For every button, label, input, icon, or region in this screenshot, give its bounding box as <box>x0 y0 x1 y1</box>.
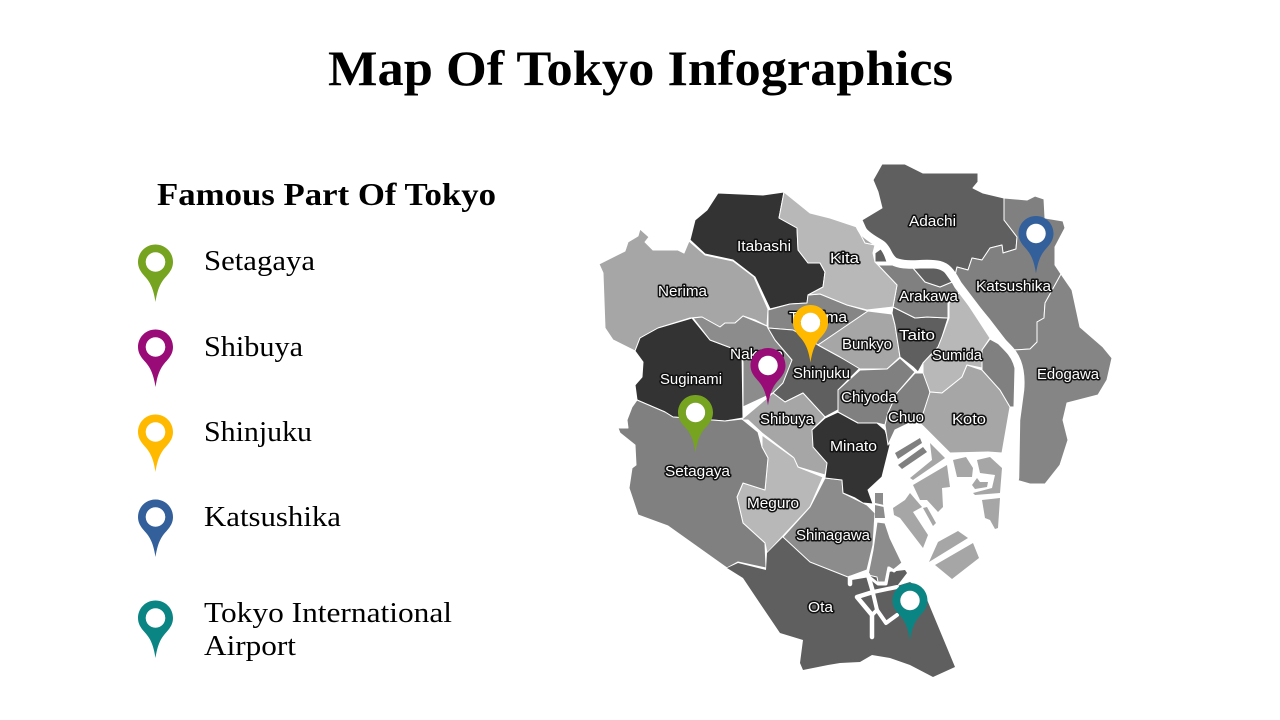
ward labels: Taito <box>899 328 935 344</box>
ward labels: Edogawa <box>1037 367 1100 383</box>
ward labels: Arakawa <box>899 289 959 305</box>
ward labels: Nakano <box>730 347 783 363</box>
ward labels <box>658 214 1100 616</box>
ward shapes <box>599 164 1112 677</box>
ward labels: Setagaya <box>665 464 731 480</box>
ward labels: Shinjuku <box>793 366 850 382</box>
legend item: Shibuya <box>138 330 304 387</box>
legend item: Setagaya <box>138 244 316 302</box>
ward labels: Suginami <box>660 372 722 388</box>
map of Tokyo wards <box>599 164 1112 677</box>
map pin: Tokyo International Airport <box>892 583 928 640</box>
ward labels: Toshima <box>789 310 848 326</box>
ward labels: Minato <box>830 439 877 455</box>
ward labels: Nerima <box>658 284 708 300</box>
ward labels: Katsushika <box>976 279 1052 295</box>
ward labels: Shinagawa <box>796 528 871 544</box>
bay islands <box>893 438 1002 579</box>
ward labels: Itabashi <box>737 239 791 255</box>
legend item: Shibuya: Shibuya <box>204 332 304 363</box>
legend item: Shinjuku <box>138 414 312 472</box>
ward labels: Chuo <box>888 410 924 426</box>
legend heading: Famous Part Of Tokyo <box>157 176 496 212</box>
ward labels: Meguro <box>747 496 799 512</box>
rivers and canals <box>850 218 1020 637</box>
legend item: Katsushika: Katsushika <box>204 502 342 533</box>
map pin: Setagaya <box>678 395 713 452</box>
ward labels: Bunkyo <box>842 337 892 353</box>
ward labels: Kita <box>830 251 860 267</box>
ward labels: Shibuya <box>760 412 815 428</box>
legend item: Shinjuku: Shinjuku <box>204 417 312 448</box>
map pin: Shibuya <box>750 348 786 406</box>
title: Map Of Tokyo Infographics <box>328 40 953 96</box>
legend item: Tokyo International Airport <box>138 598 452 662</box>
ward labels: Chiyoda <box>841 390 898 406</box>
legend item: Tokyo International Airport: Tokyo International <box>204 598 452 629</box>
ward labels: Koto <box>952 412 986 428</box>
map pin: Shinjuku <box>793 305 828 362</box>
legend item: Setagaya: Setagaya <box>204 246 316 277</box>
legend panel <box>138 176 496 662</box>
ward labels: Ota <box>808 600 834 616</box>
ward labels: Sumida <box>932 348 983 364</box>
legend item: Tokyo International Airport: Airport <box>204 631 296 662</box>
ward labels: Adachi <box>909 214 956 230</box>
map pin: Katsushika <box>1018 216 1054 274</box>
legend item: Katsushika <box>138 500 342 557</box>
